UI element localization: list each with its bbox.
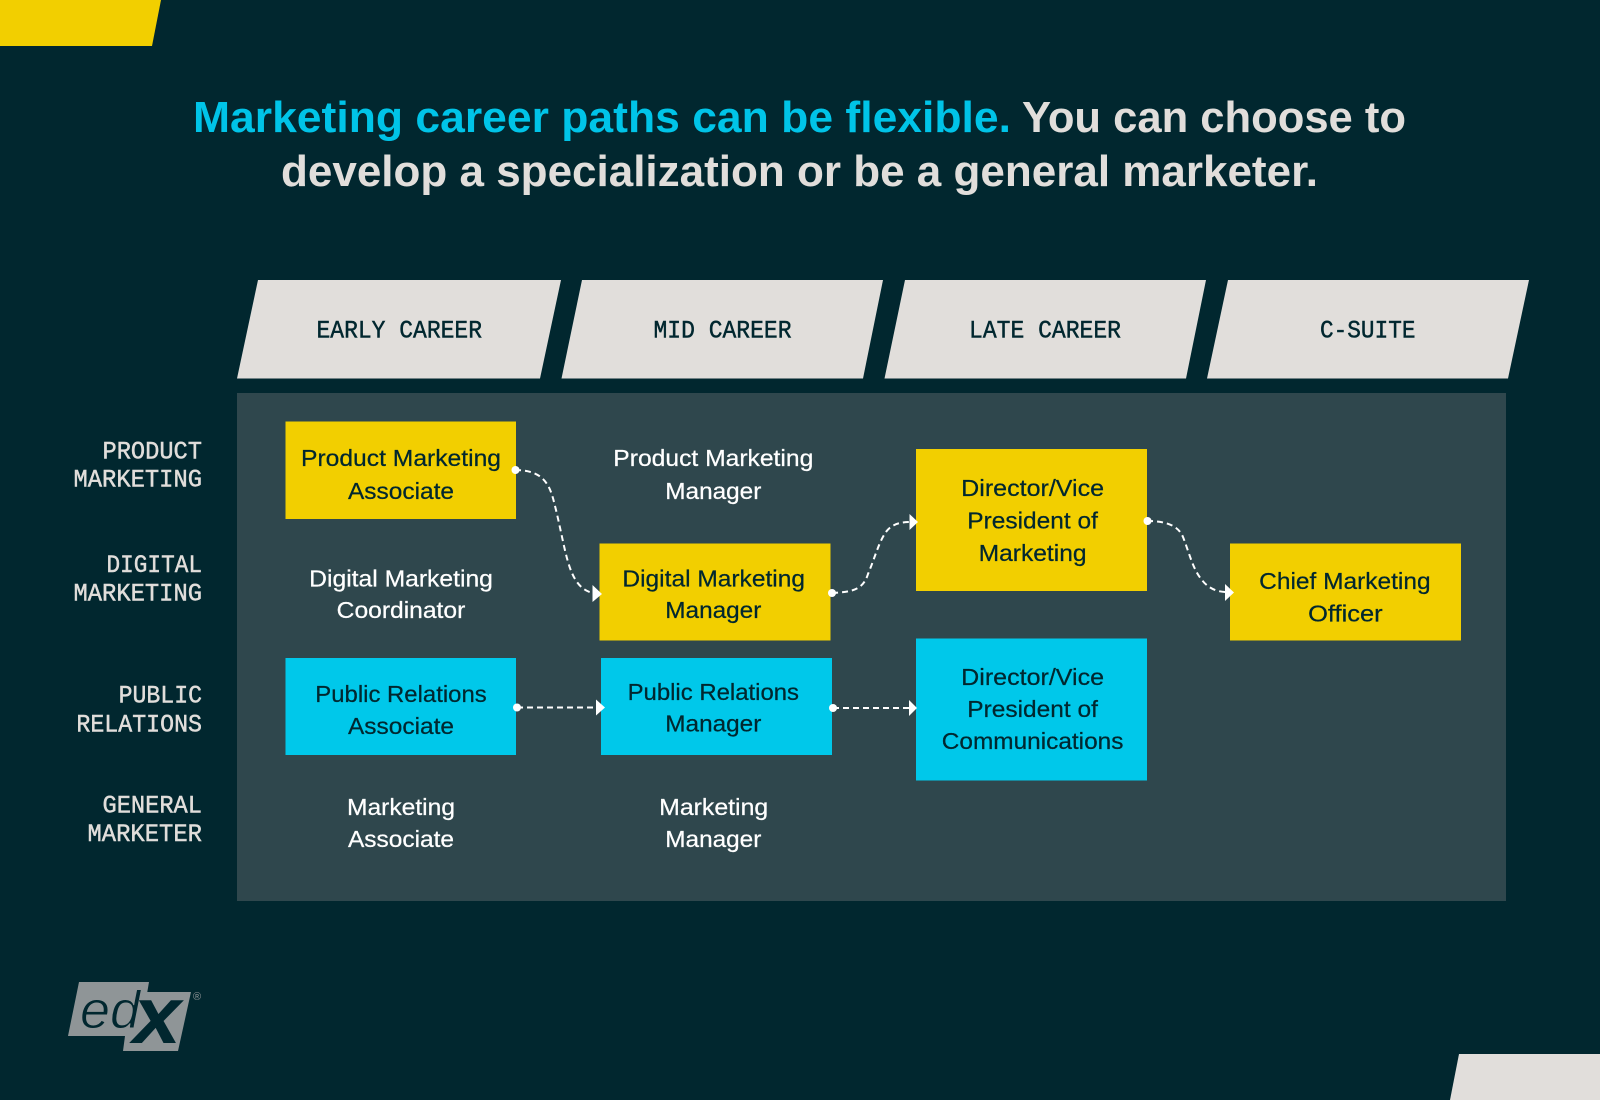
- box: public relations manager: [601, 658, 832, 755]
- column header: c-suite: C-SUITE: [1320, 316, 1416, 346]
- text: digital marketing coordinator: Digital Marketing: [309, 565, 493, 591]
- arrow: pr associate to pr manager: [513, 700, 605, 716]
- row label: public relations: PUBLIC: [119, 681, 202, 710]
- row label: digital marketing: DIGITAL: [106, 551, 202, 580]
- text: marketing associate: Marketing: [347, 794, 455, 820]
- box: public relations associate: Public Relations: [315, 681, 487, 707]
- box: director/vp of communications: President of: [967, 696, 1098, 722]
- box: product marketing associate: [286, 422, 516, 519]
- column header: mid career: [562, 280, 883, 378]
- box: public relations manager: Public Relations: [628, 679, 799, 705]
- box: public relations associate: Associate: [348, 713, 454, 739]
- logo: edX: [68, 971, 201, 1061]
- text: marketing manager: Marketing: [659, 794, 768, 820]
- text: product marketing manager: Product Marketing: [613, 445, 813, 471]
- title: develop a specialization or be a general marketer.: [281, 148, 1318, 196]
- box: public relations manager: Manager: [665, 710, 761, 736]
- row label: digital marketing: [74, 551, 202, 608]
- panel: career grid: [237, 393, 1506, 901]
- column header: c-suite: [1207, 280, 1529, 378]
- box: digital marketing manager: Digital Marketing: [622, 565, 805, 591]
- decorative yellow corner tab: [0, 0, 161, 46]
- text: marketing associate: [347, 794, 455, 852]
- box: digital marketing manager: [600, 544, 830, 640]
- box: product marketing associate: Product Marketing: [301, 445, 501, 471]
- box: product marketing associate: Associate: [348, 478, 454, 504]
- box: director/vp of communications: [916, 638, 1147, 780]
- text: marketing manager: [659, 794, 768, 852]
- text: product marketing manager: [613, 445, 813, 504]
- text: digital marketing coordinator: [309, 565, 493, 623]
- row label: general marketer: MARKETER: [88, 820, 202, 849]
- text: product marketing manager: Manager: [665, 478, 761, 504]
- row label: digital marketing: MARKETING: [74, 579, 202, 608]
- column header: early career: [237, 280, 561, 378]
- box: director/vp of marketing: President of: [967, 508, 1098, 534]
- arrow: product associate to digital manager: [512, 466, 602, 602]
- column header: early career: EARLY CAREER: [316, 316, 482, 346]
- box: director/vp of marketing: [916, 449, 1147, 591]
- title: [193, 94, 1406, 196]
- row label: product marketing: PRODUCT: [102, 438, 202, 466]
- arrow: digital manager to director of marketing: [828, 514, 918, 597]
- arrow: director of marketing to chief marketing officer: [1144, 517, 1234, 601]
- logo: edX: x: [129, 971, 184, 1061]
- text: marketing associate: Associate: [348, 826, 454, 852]
- box: digital marketing manager: Manager: [665, 597, 761, 623]
- arrow: pr manager to director of communications: [829, 700, 917, 716]
- column header: late career: LATE CAREER: [969, 316, 1121, 346]
- row label: general marketer: GENERAL: [102, 792, 202, 821]
- text: digital marketing coordinator: Coordinator: [337, 597, 465, 623]
- box: director/vp of marketing: Marketing: [979, 540, 1087, 566]
- row label: product marketing: [74, 438, 202, 495]
- text: marketing manager: Manager: [665, 826, 761, 852]
- box: public relations associate: [286, 658, 516, 755]
- row label: general marketer: [88, 792, 202, 849]
- box: chief marketing officer: Chief Marketing: [1259, 568, 1431, 594]
- title: Marketing career paths can be flexible.: [193, 94, 1011, 142]
- title: You can choose to: [1022, 94, 1406, 142]
- box: director/vp of marketing: Director/Vice: [961, 475, 1104, 501]
- column header: late career: [884, 280, 1206, 378]
- row label: public relations: [76, 681, 202, 740]
- box: chief marketing officer: Officer: [1308, 601, 1383, 627]
- box: director/vp of communications: Director/Vice: [961, 664, 1104, 690]
- row label: product marketing: MARKETING: [74, 466, 202, 495]
- logo: edX: ed: [80, 981, 142, 1040]
- box: director/vp of communications: Communications: [942, 728, 1123, 754]
- box: chief marketing officer: [1230, 544, 1461, 640]
- column header: mid career: MID CAREER: [654, 316, 792, 346]
- logo: edX: ®: [193, 991, 201, 1003]
- decorative grey corner tab: [1450, 1054, 1600, 1100]
- row label: public relations: RELATIONS: [76, 710, 202, 740]
